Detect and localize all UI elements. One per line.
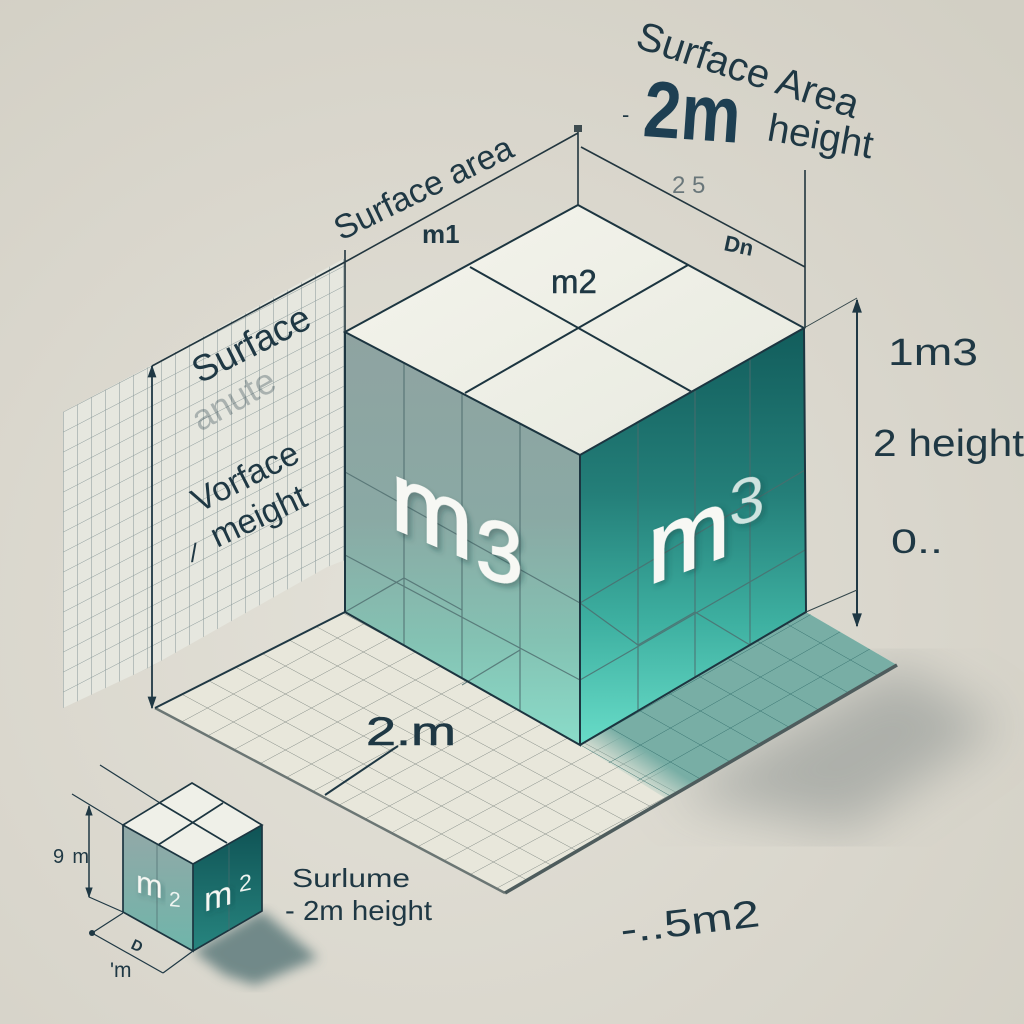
top right heading: Surface Area (631, 14, 865, 127)
right height dimension (804, 298, 1024, 626)
wall labels and height arrow: meight (204, 477, 313, 555)
small cube caption: Surlume (292, 863, 410, 893)
small cube icon (123, 783, 318, 985)
small cube caption: - 2m height (285, 895, 432, 926)
wall labels and height arrow (152, 262, 345, 708)
small cube dimensions (53, 765, 193, 982)
small cube icon: 2 (169, 888, 181, 912)
bottom area label: -..5m2 (618, 893, 762, 952)
floor grid (155, 612, 897, 893)
small cube caption (285, 863, 432, 926)
top right heading: - (622, 102, 629, 127)
small cube dimensions: D (128, 936, 145, 956)
wall labels and height arrow: Vorface (185, 434, 305, 520)
top surface area dimension: Surface area (328, 129, 520, 248)
cube face labels (391, 263, 765, 606)
top surface area dimension: 2 5 (672, 172, 705, 199)
right height dimension: 0.. (891, 523, 943, 561)
cube face labels: m (648, 465, 730, 606)
wall labels and height arrow: / (189, 537, 199, 568)
top right heading: 2m (641, 64, 744, 160)
wall labels and height arrow: Surface (185, 297, 317, 391)
cube right face (580, 328, 806, 745)
top right heading (622, 14, 877, 167)
small cube icon: m (204, 874, 232, 920)
right height dimension: 2 height (873, 423, 1024, 465)
top surface area dimension (328, 125, 805, 332)
cube left face (345, 332, 580, 745)
wall labels and height arrow: anute (184, 359, 283, 439)
grid wall with labels (63, 258, 345, 708)
large cube (345, 205, 806, 745)
small cube icon: m (136, 863, 163, 906)
top right heading: height (764, 107, 877, 167)
cast shadow (670, 665, 1000, 830)
cube face labels: 3 (729, 460, 765, 541)
cube face labels: 3 (476, 500, 523, 603)
small cube dimensions: 9 m (53, 846, 89, 868)
floor label 2m: 2.m (366, 710, 456, 754)
top surface area dimension: m1 (422, 219, 460, 249)
floor label 2m (325, 710, 456, 795)
top surface area dimension: Dn (722, 230, 756, 261)
small cube dimensions: 'm (110, 959, 132, 982)
small cube icon: 2 (239, 869, 252, 897)
cube face labels: m (391, 438, 473, 582)
cube face labels: m2 (551, 263, 597, 300)
cube top face (345, 205, 804, 455)
right height dimension: 1m3 (888, 332, 978, 374)
